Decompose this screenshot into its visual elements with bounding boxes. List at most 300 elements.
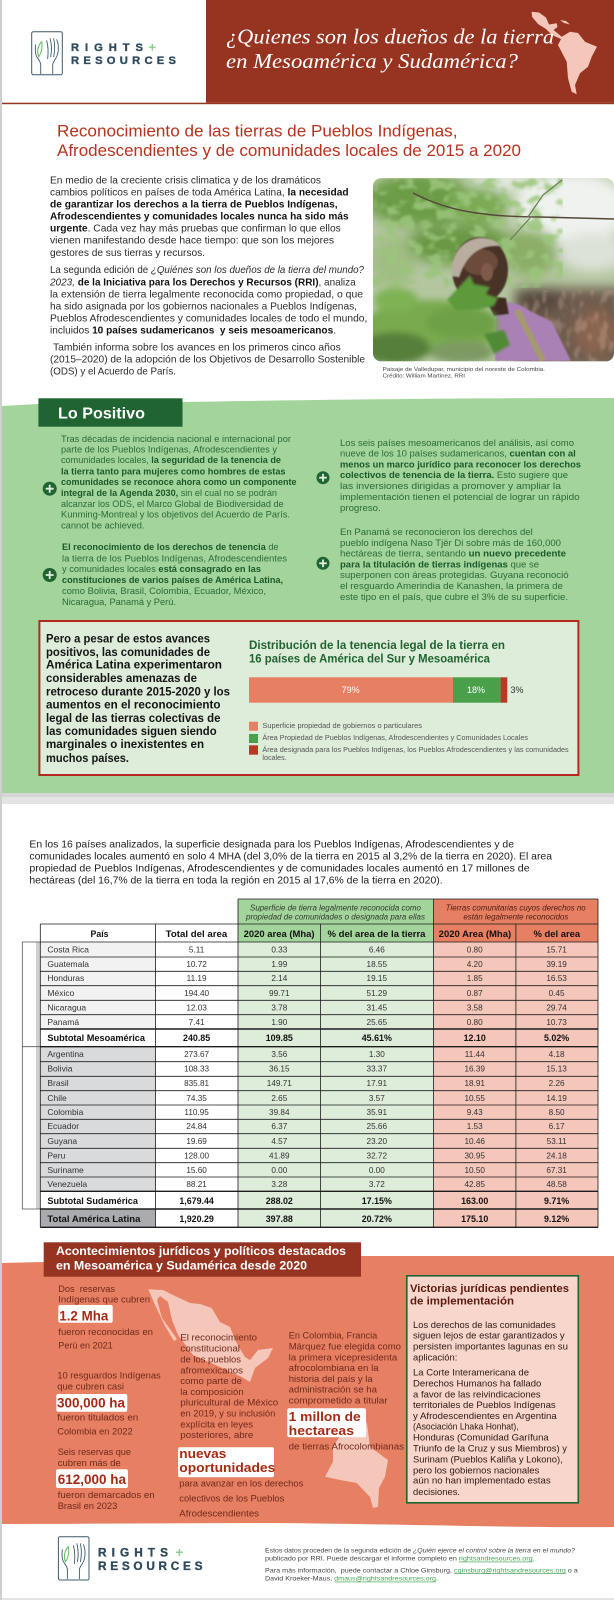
table: values: 12.03 bbox=[186, 1004, 207, 1013]
table: values: 16.53 bbox=[546, 974, 567, 983]
callout: 1 millon de hectareas: afrocolombiana en la bbox=[289, 1363, 379, 1374]
panel text: territoriales de Pueblos Indígenas bbox=[413, 1400, 556, 1411]
photo: man among foliage bbox=[373, 178, 614, 362]
callout: nuevas oportunidades: nuevas bbox=[179, 1446, 226, 1461]
table column headers: % del area bbox=[534, 929, 581, 939]
text block: threats: legal de las tierras colectivas de bbox=[46, 711, 221, 725]
table: values: 3.58 bbox=[467, 1004, 483, 1013]
positive point 1: la tierra tanto para mujeres como hombres de estas bbox=[61, 466, 286, 476]
table: values: 88.21 bbox=[186, 1180, 207, 1189]
section heading: Reconocimiento de las tierras de Pueblos Indígenas, bbox=[57, 121, 458, 140]
footer text: David Kroeker-Maus, dmaus@rightsandresources.org . bbox=[265, 1576, 438, 1583]
callout: 1 millon de hectareas: comprometido a titular bbox=[289, 1395, 389, 1406]
table: values: 3.78 bbox=[271, 1004, 288, 1013]
photo caption: Crédito: William Martinez, RRI bbox=[383, 374, 466, 380]
positive point 2 bbox=[62, 542, 287, 607]
table: values: 1.85 bbox=[467, 974, 483, 983]
text block: introduction: La segunda edición de ¿Quiénes son los dueños de la tierra del mundo? bbox=[50, 265, 364, 276]
table group headers: propiedad de comunidades o designada para ellas bbox=[245, 913, 425, 922]
panel text: decisiones. bbox=[413, 1487, 460, 1498]
stacked bar chart: 79% bbox=[342, 685, 360, 695]
positive point 1: comunidades se reconoce ahora como un componente bbox=[61, 477, 296, 487]
table: values: 7.41 bbox=[189, 1018, 205, 1027]
table: values: 17.91 bbox=[367, 1079, 387, 1088]
positive point 1: Kunming-Montreal y los objetivos del Acuerdo de París. bbox=[61, 510, 290, 520]
table: values: 15.71 bbox=[546, 946, 567, 955]
panel: Lo Positivo bbox=[2, 398, 614, 797]
table column headers: País bbox=[90, 929, 108, 939]
callout: nuevas oportunidades: El reconocimiento bbox=[180, 1333, 257, 1344]
table: values: 3.57 bbox=[369, 1094, 385, 1103]
callout: nuevas oportunidades: explícita en leyes bbox=[180, 1419, 253, 1430]
table: country names: Colombia bbox=[47, 1107, 84, 1117]
table: subtotals and total: 163.00 bbox=[461, 1196, 488, 1206]
table: values: 2.65 bbox=[271, 1094, 288, 1103]
text block: introduction: la extensión de tierra legalmente reconocida como propiedad, o que bbox=[50, 289, 363, 300]
positive point 4: En Panamá se reconocieron los derechos del bbox=[340, 527, 533, 537]
table: country names: Chile bbox=[47, 1093, 67, 1103]
chart legend: Superficie propiedad de gobiernos o particulares bbox=[262, 721, 422, 730]
positive point 2: El reconocimiento de los derechos de tenencia de bbox=[62, 542, 278, 552]
text block: introduction: urgente. Cada vez hay más pruebas que confirman lo que ellos bbox=[50, 224, 341, 235]
positive point 4: este tipo en el país, que cubre el 3% de su superficie. bbox=[340, 592, 568, 602]
chart title: 16 países de América del Sur y Mesoamérica bbox=[249, 654, 491, 666]
callout: 1 millon de hectareas: de tierras Afrocolombianas bbox=[289, 1442, 404, 1453]
chart title bbox=[249, 640, 505, 666]
footer text: Estos datos proceden de la segunda edición de ¿Quién ejerce el control sobre la tierra en el mundo? bbox=[265, 1547, 575, 1554]
text block: introduction: de garantizar los derechos a la tierra de Pueblos Indígenas, bbox=[50, 200, 338, 211]
table: values: 5.11 bbox=[189, 946, 205, 955]
main title: ¿Quienes son los dueños de la tierra bbox=[226, 24, 554, 48]
callout: 1.2 Mha bbox=[58, 1284, 153, 1351]
table: subtotals and total: 9.71% bbox=[544, 1196, 569, 1206]
chart legend: Área Propiedad de Pueblos Indígenas, Afrodescendientes y Comunidades Locales bbox=[262, 733, 528, 742]
text block: introduction: Afrodescendientes y comunidades locales nunca ha sido más bbox=[50, 212, 349, 223]
table: values: 19.15 bbox=[367, 974, 387, 983]
table: subtotals and total: Subtotal Sudamérica bbox=[47, 1196, 138, 1206]
positive point 4: el resguardo Amerindia de Kanashen, la primera de bbox=[340, 581, 563, 591]
table: land tenure by country bbox=[22, 899, 598, 1227]
callout: 612,000 ha: fueron demarcados en bbox=[58, 1490, 155, 1501]
panel text: a favor de las reivindicaciones bbox=[413, 1389, 541, 1400]
callout: 1.2 Mha: 1.2 Mha bbox=[59, 1309, 109, 1324]
panel text: Los derechos de las comunidades bbox=[413, 1320, 556, 1331]
callout: nuevas oportunidades: de los pueblos bbox=[180, 1354, 241, 1365]
positive point 3: implementación tienen el potencial de lograr un rápido bbox=[340, 492, 580, 502]
table: values: 99.71 bbox=[269, 989, 290, 998]
table: subtotals and total: 12.10 bbox=[464, 1033, 486, 1043]
table: values: 35.91 bbox=[367, 1108, 387, 1117]
table: values: 74.35 bbox=[186, 1094, 207, 1103]
text block: threats bbox=[46, 632, 230, 765]
panel text: y Afrodescendientes en Argentina bbox=[413, 1411, 557, 1422]
callout: 1 millon de hectareas: administración se ha bbox=[289, 1385, 378, 1396]
callout: 612,000 ha bbox=[56, 1447, 155, 1512]
table column headers: Total del area bbox=[166, 929, 228, 939]
panel text: pero los gobiernos nacionales bbox=[413, 1465, 540, 1476]
table: country names: Nicaragua bbox=[47, 1003, 86, 1013]
text block: introduction: 2023, de la Iniciativa para los Derechos y Recursos (RRI), analiza bbox=[49, 277, 356, 288]
text block: introduction: (ODS) y el Acuerdo de París. bbox=[50, 367, 176, 378]
callout: nuevas oportunidades: afromexicanos bbox=[180, 1365, 243, 1376]
table: country names: México bbox=[47, 988, 75, 998]
table: values: 11.44 bbox=[465, 1050, 485, 1059]
positive point 4: pueblo indígena Naso Tjër Di sobre más de 160,000 bbox=[340, 538, 561, 548]
callout: 300,000 ha: que cubren casi bbox=[57, 1381, 124, 1392]
text block: introduction: También informa sobre los avances en los primeros cinco años bbox=[53, 343, 341, 354]
panel: legal and political events bbox=[2, 1242, 614, 1527]
icon: plus 3 bbox=[316, 471, 330, 484]
text block: introduction: En medio de la creciente crisis climatica y de los dramáticos bbox=[50, 176, 321, 187]
table: country names bbox=[47, 945, 89, 1189]
callout: nuevas oportunidades: pluricultural de México bbox=[180, 1397, 278, 1408]
table: values: 0.00 bbox=[271, 1166, 288, 1175]
table: values: 53.11 bbox=[547, 1137, 567, 1146]
panel text: persisten importantes lagunas en su bbox=[413, 1341, 568, 1352]
table: values: 0.80 bbox=[467, 946, 483, 955]
callout: 1.2 Mha: fueron reconocidas en bbox=[58, 1327, 153, 1338]
table: subtotals and total: 1,920.29 bbox=[179, 1214, 214, 1224]
table: values: 41.89 bbox=[269, 1152, 290, 1161]
text block: introduction bbox=[49, 176, 367, 378]
heading tab: Lo Positivo bbox=[38, 398, 183, 427]
table: values: 31.45 bbox=[367, 1004, 387, 1013]
table: values: 67.31 bbox=[546, 1166, 567, 1175]
table: country names: Peru bbox=[47, 1151, 66, 1161]
table: values: 10.46 bbox=[464, 1137, 485, 1146]
table: subtotals and total: 9.12% bbox=[544, 1214, 569, 1224]
table: values: 25.66 bbox=[367, 1122, 387, 1131]
panel heading: Victorias jurídicas pendientes bbox=[410, 1283, 569, 1295]
table group headers bbox=[245, 904, 586, 922]
table: subtotals and total: 109.85 bbox=[266, 1033, 293, 1043]
table: values: 194.40 bbox=[184, 989, 210, 998]
table: values: 3.72 bbox=[369, 1180, 385, 1189]
table: values: 39.19 bbox=[546, 960, 567, 969]
callout: 612,000 ha: 612,000 ha bbox=[58, 1472, 126, 1487]
table: values: 42.85 bbox=[464, 1180, 485, 1189]
text block: threats: aumentos en el reconocimiento bbox=[46, 698, 220, 712]
table: values bbox=[184, 946, 567, 1189]
table: values: 1.90 bbox=[271, 1018, 288, 1027]
table: values: 128.00 bbox=[184, 1152, 210, 1161]
stacked bar chart bbox=[249, 677, 524, 703]
heading tab: events bbox=[44, 1242, 361, 1277]
panel text: Honduras (Comunidad Garífuna bbox=[413, 1433, 549, 1444]
chart title: Distribución de la tenencia legal de la tierra en bbox=[249, 640, 505, 652]
table: subtotals and total: 397.88 bbox=[266, 1214, 293, 1224]
table: subtotals and total: 5.02% bbox=[544, 1033, 569, 1043]
table: values: 4.20 bbox=[467, 960, 483, 969]
text block: threats: marginales o inexistentes en bbox=[46, 737, 204, 751]
panel text: (Asociación Lhaka Honhat), bbox=[413, 1421, 519, 1432]
callout: 300,000 ha: Colombia en 2022 bbox=[57, 1427, 133, 1438]
positive point 3: las inversiones dirigidas a promover y ampliar la bbox=[340, 481, 562, 491]
table: values: 1.53 bbox=[467, 1122, 483, 1131]
table: values: 24.84 bbox=[186, 1122, 207, 1131]
logo: Rights + Resources: RESOURCES bbox=[71, 55, 177, 67]
table: values: 273.67 bbox=[184, 1050, 210, 1059]
table: subtotals and total: Total América Latina bbox=[47, 1214, 140, 1224]
table: values: 10.73 bbox=[546, 1018, 567, 1027]
positive point 4: hectáreas de tierra, sentando un nuevo precedente bbox=[340, 548, 566, 558]
logo: Rights + Resources: + bbox=[148, 40, 156, 54]
callout: 300,000 ha: fueron titulados en bbox=[57, 1413, 138, 1424]
positive point 4: para la titulación de tierras indígenas que se bbox=[340, 560, 539, 570]
callout: 300,000 ha bbox=[56, 1371, 161, 1438]
callout: 1 millon de hectareas bbox=[287, 1331, 404, 1453]
callout: nuevas oportunidades bbox=[178, 1333, 303, 1520]
text block: analysis of 16 countries: comunidades locales aumentó en solo 4 MHA (del 3,0% de la tierra en 2015 al 3,2% de la tierra en 2020). El area bbox=[29, 852, 552, 863]
panel text: aún no han implementado estas bbox=[413, 1476, 551, 1487]
text block: threats: retroceso durante 2015-2020 y los bbox=[46, 684, 230, 698]
table: values: 25.65 bbox=[367, 1018, 387, 1027]
table: values: 108.33 bbox=[184, 1065, 210, 1074]
callout: 1 millon de hectareas: Márquez fue elegida como bbox=[289, 1341, 401, 1352]
table: values: 39.84 bbox=[269, 1108, 290, 1117]
table: country names: Panamá bbox=[47, 1017, 79, 1027]
table: values: 11.19 bbox=[187, 974, 207, 983]
positive point 1: Tras décadas de incidencia nacional e internacional por bbox=[61, 434, 291, 444]
table group headers: Superficie de tierra legalmente reconocida como bbox=[250, 904, 422, 913]
table: values: 19.69 bbox=[186, 1137, 207, 1146]
table: values: 30.95 bbox=[464, 1152, 485, 1161]
footer bbox=[58, 1537, 578, 1583]
table: values: 149.71 bbox=[267, 1079, 292, 1088]
table: values: 48.58 bbox=[546, 1180, 567, 1189]
positive point 2: constituciones de varios países de América Latina, bbox=[62, 575, 283, 585]
text block: introduction: ha sido asignada por los gobiernos nacionales a Pueblos Indígenas, bbox=[50, 301, 357, 312]
footer logo: RESOURCES bbox=[98, 1559, 203, 1573]
callout: 300,000 ha: 300,000 ha bbox=[57, 1395, 125, 1410]
table: values: 32.72 bbox=[367, 1152, 387, 1161]
table: country names: Venezuela bbox=[47, 1179, 87, 1189]
table: values: 835.81 bbox=[184, 1079, 210, 1088]
table: country names: Brasil bbox=[47, 1078, 69, 1088]
heading tab: Lo Positivo: Lo Positivo bbox=[58, 406, 145, 423]
table: values: 1.30 bbox=[369, 1050, 385, 1059]
logo: Rights + Resources: RIGHTS bbox=[71, 42, 144, 54]
table: subtotals and total: 175.10 bbox=[461, 1214, 488, 1224]
stacked bar chart: 18% bbox=[467, 685, 485, 695]
table column headers: % del area de la tierra bbox=[328, 929, 427, 939]
table: values: 29.74 bbox=[546, 1004, 567, 1013]
table: values: 3.28 bbox=[271, 1180, 288, 1189]
table: country names: Honduras bbox=[47, 973, 84, 983]
panel: threats and land tenure chart bbox=[39, 621, 578, 775]
callout: 1 millon de hectareas: la primera vicepresidenta bbox=[289, 1352, 398, 1363]
table: values: 6.17 bbox=[549, 1122, 565, 1131]
table: values: 0.87 bbox=[467, 989, 483, 998]
footer logo bbox=[58, 1537, 203, 1580]
callout: 1.2 Mha: Indígenas que cubren bbox=[58, 1294, 150, 1305]
footer text: publicado por RRI. Puede descargar el informe completo en rightsandresources.org . bbox=[265, 1556, 535, 1563]
table: values: 10.55 bbox=[464, 1094, 485, 1103]
text block: introduction: vienen manifestando desde hace tiempo: que son los mejores bbox=[50, 236, 334, 247]
table: values: 10.72 bbox=[186, 960, 207, 969]
positive point 1: comunidades locales, la seguridad de la tenencia de bbox=[61, 455, 281, 465]
panel text: aplicación: bbox=[413, 1352, 457, 1363]
table: values: 36.15 bbox=[269, 1065, 290, 1074]
table: values: 110.95 bbox=[184, 1108, 209, 1117]
positive point 2: y comunidades locales está consagrado en las bbox=[62, 564, 261, 574]
callout: 1 millon de hectareas: historia del país y la bbox=[289, 1374, 373, 1385]
table: subtotals and total bbox=[47, 1033, 569, 1224]
table: country names: Guyana bbox=[47, 1136, 77, 1146]
table: values: 33.37 bbox=[367, 1065, 387, 1074]
heading tab: events: Acontecimientos jurídicos y políticos destacados bbox=[56, 1244, 346, 1258]
callout: nuevas oportunidades: posteriores, abre bbox=[180, 1430, 253, 1441]
table: values: 15.13 bbox=[546, 1065, 567, 1074]
positive point 4: superponen con áreas protegidas. Guyana reconoció bbox=[340, 570, 569, 580]
panel text: siguen lejos de estar garantizados y bbox=[413, 1331, 565, 1342]
text block: threats: muchos países. bbox=[46, 751, 129, 765]
text block: introduction: gestores de sus tierras y recursos. bbox=[50, 248, 205, 259]
callout: 1 millon de hectareas: 1 millon de bbox=[289, 1409, 361, 1424]
panel text: La Corte Interamericana de bbox=[413, 1367, 529, 1378]
table: values: 0.45 bbox=[549, 989, 565, 998]
table: subtotals and total: 1,679.44 bbox=[179, 1196, 214, 1206]
footer text: Para más información, puede contactar a Chloe Ginsburg, cginsburg@rightsandresources.org o a bbox=[265, 1567, 578, 1574]
callout: nuevas oportunidades: colectivos de los Pueblos bbox=[179, 1494, 284, 1505]
positive point 1: integral de la Agenda 2030, sin el cual no se podrán bbox=[61, 488, 277, 498]
table: values: 15.60 bbox=[186, 1166, 207, 1175]
text block: introduction: incluidos 10 países sudamericanos y seis mesoamericanos. bbox=[50, 325, 336, 336]
table: values: 16.39 bbox=[464, 1065, 485, 1074]
positive point 3 bbox=[340, 438, 581, 513]
photo caption bbox=[383, 367, 546, 380]
table: values: 2.26 bbox=[549, 1079, 565, 1088]
callout: nuevas oportunidades: Afrodescendientes bbox=[179, 1509, 259, 1520]
text block: threats: positivos, las comunidades de bbox=[46, 645, 210, 659]
table column headers: 2020 area (Mha) bbox=[244, 929, 315, 939]
table column headers: 2020 Area (Mha) bbox=[439, 929, 511, 939]
text block: analysis of 16 countries: En los 16 países analizados, la superficie designada para los Pueblos Indígenas, Afrodescendientes y de bbox=[29, 840, 514, 851]
table: values: 2.14 bbox=[271, 974, 288, 983]
table: values: 18.91 bbox=[464, 1079, 485, 1088]
callout: nuevas oportunidades: constitucional bbox=[180, 1343, 240, 1354]
text block: introduction: Pueblos Afrodescendientes y comunidades locales de todo el mundo, bbox=[50, 313, 367, 324]
callout: 1.2 Mha: Perú en 2021 bbox=[58, 1340, 113, 1351]
positive point 1: alcanzar los ODS, el Marco Global de Biodiversidad de bbox=[61, 499, 284, 509]
callout: nuevas oportunidades: como parte de bbox=[180, 1376, 242, 1387]
table: values: 8.50 bbox=[549, 1108, 565, 1117]
table: values: 18.55 bbox=[367, 960, 387, 969]
text block: analysis of 16 countries: propiedad de Pueblos Indígenas, Afrodescendientes y de comunidades locales aumentó en 17 millones de bbox=[29, 864, 530, 875]
main title: en Mesoamérica y Sudamérica? bbox=[226, 49, 518, 73]
callout: 1.2 Mha: Dos reservas bbox=[58, 1284, 115, 1295]
heading tab: events: en Mesoamérica y Sudamérica desde 2020 bbox=[56, 1258, 307, 1272]
footer logo: + bbox=[176, 1545, 184, 1560]
text block: threats: las comunidades siguen siendo bbox=[46, 724, 217, 738]
table: country names: Argentina bbox=[47, 1049, 84, 1059]
header banner bbox=[2, 0, 614, 104]
table: country names: Suriname bbox=[47, 1165, 84, 1175]
table: values: 1.99 bbox=[271, 960, 288, 969]
table: values: 23.20 bbox=[367, 1137, 387, 1146]
table column headers bbox=[90, 929, 581, 939]
table: country names: Ecuador bbox=[47, 1121, 79, 1131]
chart legend: locales. bbox=[262, 753, 287, 762]
text block: introduction: cambios políticos en países de toda América Latina, la necesidad bbox=[50, 188, 349, 199]
callout: nuevas oportunidades: en 2019, y su inclusión bbox=[180, 1409, 275, 1420]
callout: 612,000 ha: cubren más de bbox=[58, 1458, 121, 1469]
table: values: 4.18 bbox=[549, 1050, 565, 1059]
table: values: 4.57 bbox=[271, 1137, 288, 1146]
table: values: 10.50 bbox=[464, 1166, 485, 1175]
stacked bar chart: 3% bbox=[510, 685, 524, 695]
icon: map of Mexico bbox=[148, 1289, 273, 1382]
photo caption: Paisaje de Valledupar, municipio del noreste de Colombia. bbox=[383, 367, 546, 373]
chart legend: Área designada para los Pueblos Indígenas, los Pueblos Afrodescendientes y las comunidades bbox=[262, 745, 569, 754]
positive point 2: como Bolivia, Brasil, Colombia, Ecuador, México, bbox=[62, 586, 266, 596]
panel text bbox=[413, 1320, 568, 1498]
positive point 3: menos un marco jurídico para reconocer los derechos bbox=[340, 460, 581, 470]
table: subtotals and total: 17.15% bbox=[362, 1196, 392, 1206]
icon: map of Colombia bbox=[325, 1416, 388, 1508]
text block: introduction: (2015–2020) de la adopción de los Objetivos de Desarrollo Sostenible bbox=[50, 355, 365, 366]
table: country names: Costa Rica bbox=[47, 945, 89, 955]
text block: threats: considerables amenazas de bbox=[46, 671, 197, 685]
table: subtotals and total: 288.02 bbox=[266, 1196, 293, 1206]
table: values: 3.56 bbox=[271, 1050, 288, 1059]
panel text: Surinam (Pueblos Kaliña y Lokono), bbox=[413, 1454, 563, 1465]
text block: analysis of 16 countries: hectáreas (del 16,7% de la tierra en toda la región en 2015 al 17,6% de la tierra en 2020). bbox=[29, 876, 443, 887]
panel heading: de implementación bbox=[410, 1296, 514, 1308]
table: subtotals and total: Subtotal Mesoamérica bbox=[47, 1033, 145, 1043]
table: values: 0.80 bbox=[467, 1018, 483, 1027]
table: values: 0.33 bbox=[271, 946, 288, 955]
panel text: Derechos Humanos ha fallado bbox=[413, 1379, 541, 1390]
icon: plus 1 bbox=[43, 482, 57, 496]
section heading bbox=[57, 121, 521, 160]
footer logo: RIGHTS bbox=[98, 1546, 168, 1560]
positive point 3: colectivos de tenencia de la tierra. Esto sugiere que bbox=[340, 470, 568, 480]
positive point 1: cannot be achieved. bbox=[61, 520, 144, 530]
footer text bbox=[265, 1547, 578, 1583]
panel text: Triunfo de la Cruz y sus Miembros) y bbox=[413, 1443, 567, 1454]
table: values: 6.37 bbox=[271, 1122, 288, 1131]
table: values: 51.29 bbox=[367, 989, 387, 998]
text block: analysis of 16 countries bbox=[29, 840, 552, 887]
positive point 1: parte de los Pueblos Indígenas, Afrodescendientes y bbox=[61, 444, 277, 454]
callout: 1 millon de hectareas: En Colombia, Francia bbox=[289, 1331, 378, 1342]
panel heading bbox=[410, 1283, 569, 1308]
positive point 4 bbox=[340, 527, 569, 602]
main title bbox=[226, 24, 554, 73]
chart legend bbox=[249, 721, 569, 762]
panel: Victorias jurídicas pendientes bbox=[407, 1276, 578, 1503]
text block: threats: Pero a pesar de estos avances bbox=[46, 632, 210, 646]
positive point 3: Los seis países mesoamericanos del análisis, así como bbox=[340, 438, 574, 448]
table: subtotals and total: 240.85 bbox=[183, 1033, 210, 1043]
positive point 2: la tierra de los Pueblos Indígenas, Afrodescendientes bbox=[62, 554, 287, 564]
callout: nuevas oportunidades: para avanzar en los derechos bbox=[179, 1479, 303, 1490]
icon: map of Latin America bbox=[532, 12, 597, 94]
table: country names: Guatemala bbox=[47, 959, 89, 969]
logo: Rights + Resources bbox=[32, 32, 177, 75]
positive point 1 bbox=[61, 434, 296, 530]
table: values: 14.19 bbox=[546, 1094, 567, 1103]
callout: 1 millon de hectareas: hectareas bbox=[289, 1423, 354, 1438]
positive point 3: progreso. bbox=[340, 503, 381, 513]
callout: nuevas oportunidades: oportunidades bbox=[179, 1460, 275, 1475]
positive point 3: nueve de los 10 países sudamericanos, cuentan con al bbox=[340, 448, 576, 458]
callout: 612,000 ha: Seis reservas que bbox=[58, 1447, 131, 1458]
table: values: 24.18 bbox=[546, 1152, 567, 1161]
icon: plus 4 bbox=[316, 557, 330, 570]
table: values: 9.43 bbox=[467, 1108, 483, 1117]
